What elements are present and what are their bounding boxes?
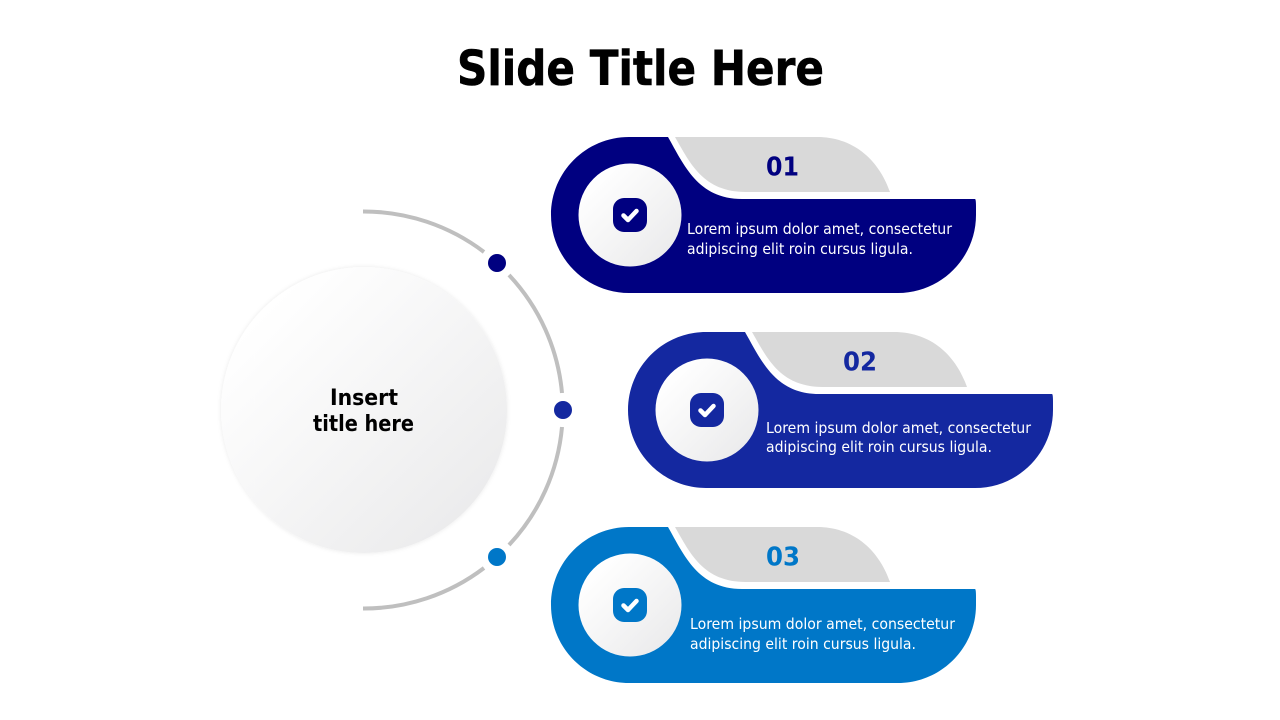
- segmented arc: [363, 211, 562, 609]
- item 01 text: adipiscing elit roin cursus ligula.: [687, 240, 913, 258]
- central circle label: title here: [313, 412, 414, 437]
- item 02 text: adipiscing elit roin cursus ligula.: [766, 438, 992, 456]
- item 03 text: adipiscing elit roin cursus ligula.: [690, 635, 916, 653]
- item 01 number: 01: [766, 152, 799, 182]
- central circle label: Insert: [330, 386, 398, 411]
- item 02 text: Lorem ipsum dolor amet, consectetur: [766, 419, 1032, 437]
- item 03 tab: [675, 527, 890, 582]
- item 02 number: 02: [843, 348, 877, 378]
- panel: item 01: [551, 137, 976, 293]
- icon: item 03 check badge: [578, 554, 682, 656]
- item 02 tab: [752, 332, 967, 387]
- timeline dot 1: [488, 254, 506, 272]
- title: Slide Title Here: [457, 41, 824, 97]
- item 03 text: Lorem ipsum dolor amet, consectetur: [690, 615, 956, 633]
- panel: item 02: [628, 332, 1053, 488]
- timeline dot 3: [488, 548, 506, 566]
- item 01 tab: [675, 137, 890, 192]
- item 03 body: [551, 527, 976, 683]
- icon: item 01 check badge: [578, 164, 682, 266]
- central circle: [221, 267, 507, 553]
- icon: item 02 check badge: [656, 358, 758, 462]
- timeline dot 2: [554, 401, 572, 419]
- item 01 text: Lorem ipsum dolor amet, consectetur: [687, 220, 953, 238]
- panel: item 03: [551, 527, 976, 683]
- item 01 body: [551, 137, 976, 293]
- item 03 number: 03: [766, 542, 800, 572]
- item 02 body: [628, 332, 1053, 488]
